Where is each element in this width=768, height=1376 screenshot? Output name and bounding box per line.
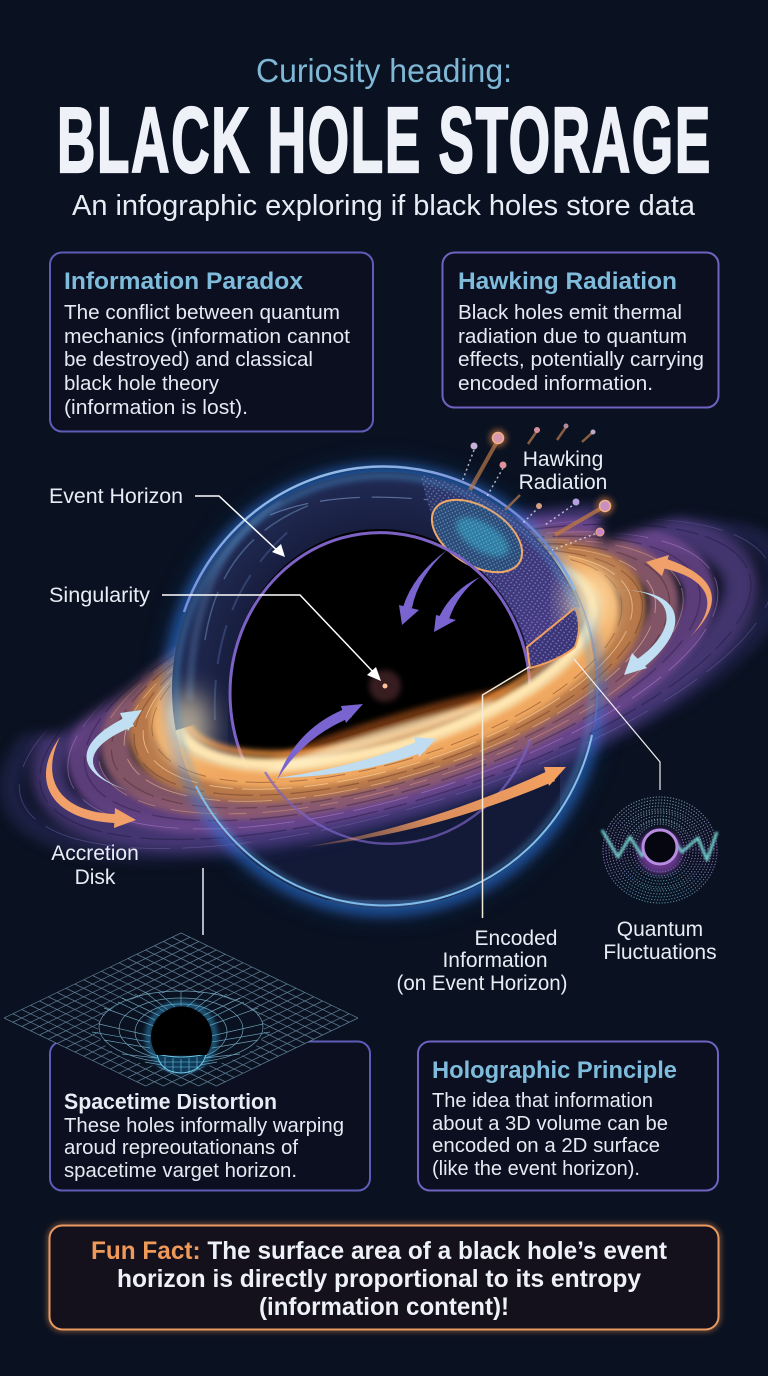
label: accretion disk: Accretion (51, 842, 139, 865)
panel text: be destroyed) and classical (64, 349, 313, 371)
panel text: aroud repreoutationans of (64, 1137, 298, 1159)
arrow: left orange (46, 737, 136, 828)
panel text (64, 302, 350, 419)
panel: information paradox (50, 252, 373, 432)
label: event horizon: Event Horizon (49, 485, 183, 508)
panel: holographic principle (418, 1042, 718, 1190)
outer glow (168, 468, 600, 912)
arrow: right orange (646, 555, 712, 637)
label: singularity (49, 584, 381, 681)
shell surface detail (190, 475, 580, 888)
panel: spacetime distortion (50, 1042, 370, 1190)
grid plane (4, 933, 358, 1094)
black interior (230, 529, 530, 851)
label: singularity: Singularity (49, 584, 150, 607)
label: encoded information (396, 927, 568, 995)
label: hawking radiation (519, 448, 607, 494)
panel heading: Spacetime Distortion (64, 1089, 277, 1114)
label: accretion disk: Disk (75, 866, 116, 889)
glow halo (170, 470, 598, 910)
panel text: encoded on a 2D surface (432, 1135, 660, 1157)
leader: spacetime (202, 868, 204, 935)
panel text: black hole theory (64, 373, 219, 395)
callout text: Fun Fact: The surface area of a black hole’s event (91, 1237, 668, 1265)
eyebrow heading: Curiosity heading: (256, 52, 512, 89)
title block (57, 52, 712, 222)
subtitle: An infographic exploring if black holes store data (72, 190, 696, 222)
panel text: encoded information. (458, 373, 653, 395)
panel text: (like the event horizon). (432, 1158, 640, 1180)
arrow: right light blue (620, 590, 675, 675)
panel text (64, 1115, 344, 1182)
label: quantum fluctuations: Fluctuations (603, 941, 717, 964)
spacetime grid diagram (4, 933, 358, 1103)
label: quantum fluctuations: Quantum (617, 918, 703, 941)
hawking radiation particles (462, 424, 614, 550)
bowl (157, 1054, 206, 1073)
label: hawking radiation: Radiation (519, 471, 607, 494)
event horizon shell (172, 472, 596, 908)
label: event horizon (49, 485, 285, 557)
panel: hawking radiation (442, 252, 718, 408)
grid lines (4, 933, 358, 1103)
panel text (458, 302, 704, 395)
panel text: The idea that information (432, 1090, 653, 1112)
singularity glow (369, 670, 401, 702)
encoded information patch (527, 608, 579, 668)
panel text: about a 3D volume can be (432, 1113, 668, 1135)
leader: quantum fluctuations (574, 659, 660, 790)
callout: fun fact (50, 1226, 718, 1330)
leader: encoded information (482, 667, 529, 918)
disk hot spots (166, 570, 612, 779)
panel text: The conflict between quantum (64, 302, 340, 324)
arrow: left light blue (87, 710, 142, 790)
well glow (148, 1004, 214, 1070)
arrow: purple infall 2 (434, 577, 480, 632)
label: hawking radiation: Hawking (523, 448, 603, 471)
label: quantum fluctuations (603, 918, 717, 964)
arrow: purple outflow (277, 704, 363, 780)
warp well (98, 992, 264, 1068)
panel heading: Holographic Principle (432, 1057, 677, 1084)
callout text (91, 1237, 668, 1321)
panel text: mechanics (information cannot (64, 326, 350, 348)
interior below disk (220, 762, 560, 900)
callout text: horizon is directly proportional to its entropy (117, 1265, 641, 1293)
accretion disk front (176, 607, 596, 858)
warm glow over lower interior (240, 674, 536, 792)
panel text: effects, potentially carrying (458, 349, 704, 371)
label: encoded information: Information (442, 949, 548, 972)
label: encoded information: Encoded (475, 927, 557, 950)
panel heading: Information Paradox (64, 268, 304, 295)
panel text: Black holes emit thermal (458, 302, 682, 324)
panel heading: Hawking Radiation (458, 268, 677, 295)
lower shell overlay (176, 466, 597, 905)
hawking encoded patch (419, 485, 535, 587)
panel text: radiation due to quantum (458, 326, 687, 348)
label: encoded information: (on Event Horizon) (396, 972, 568, 995)
panel text: These holes informally warping (64, 1115, 344, 1137)
panel text: spacetime varget horizon. (64, 1160, 297, 1182)
panel text (432, 1090, 668, 1180)
icon: quantum fluctuations (602, 797, 717, 903)
inner horizon outline (230, 533, 530, 770)
accretion disk back (0, 500, 768, 866)
callout text: (information content)! (259, 1293, 509, 1321)
panel text: (information is lost). (64, 397, 248, 419)
arrow: purple infall 1 (399, 550, 447, 625)
arrow: orange disk front (304, 767, 566, 847)
arrow: light blue disk front (277, 737, 436, 778)
black sphere (151, 1006, 212, 1055)
label: accretion disk (51, 842, 139, 889)
black hole illustration (0, 424, 768, 919)
